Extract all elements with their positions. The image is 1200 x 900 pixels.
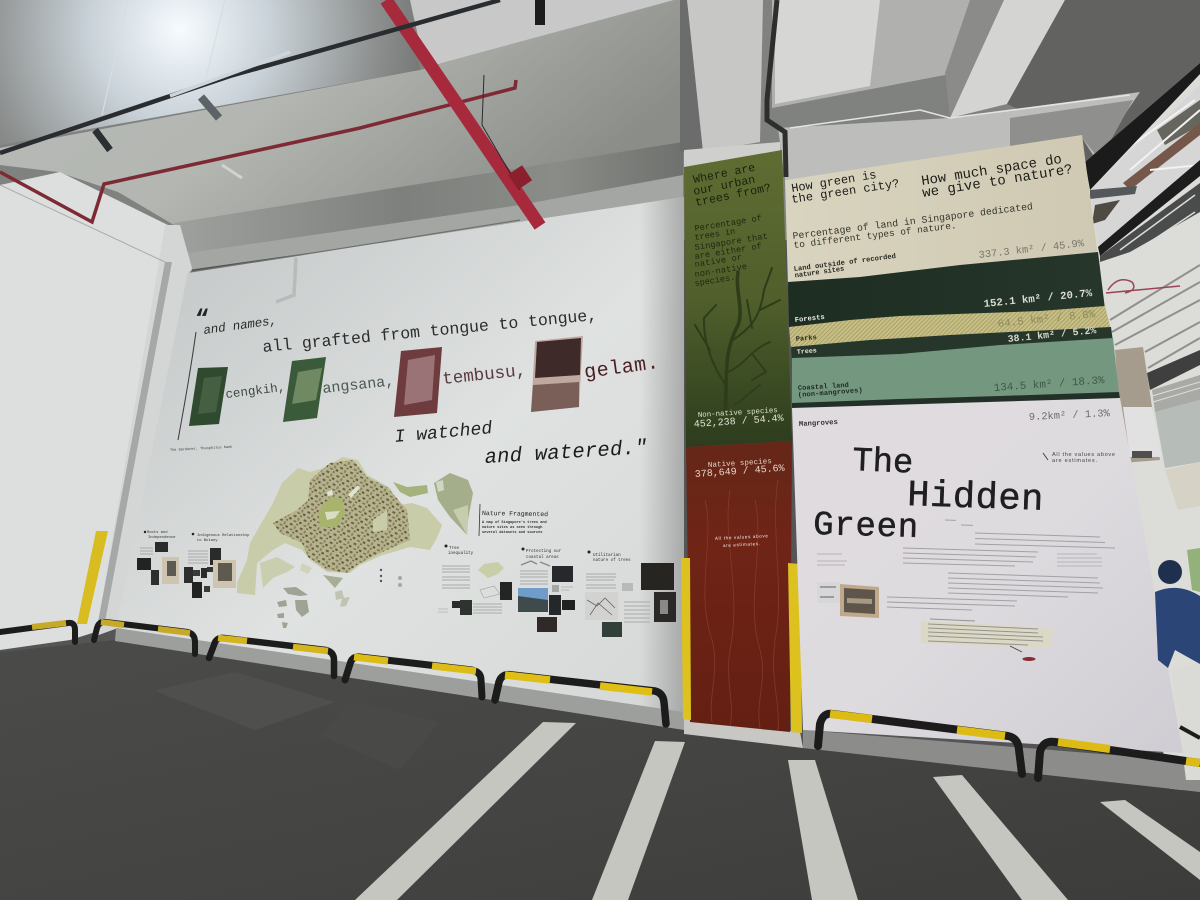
band: forests [788, 252, 1105, 329]
stat: native species: 378,649 / 45.6% [694, 463, 785, 481]
panel: Protecting our coastal areas [518, 548, 575, 632]
safety barriers [0, 622, 1200, 778]
left side wall [0, 172, 178, 650]
map: Singapore nature fragmented [237, 457, 473, 628]
fire sprinkler pipes [0, 0, 540, 226]
heading: how green is the green city: How much space do [920, 152, 1063, 190]
description: are either of [694, 241, 763, 262]
heading: how green is the green city: we give to nature? [921, 162, 1074, 202]
black conduit and track lights [0, 0, 1130, 302]
band: coastal land [792, 338, 1119, 405]
note: estimates: All the values above [715, 533, 768, 541]
barrier 4 [345, 657, 482, 697]
label: trees: Trees [797, 347, 817, 357]
side notes [817, 554, 1102, 566]
description: native or [694, 253, 743, 270]
barrier 6 [818, 714, 1022, 774]
barrier 7 [1038, 742, 1200, 778]
band: parks [789, 306, 1111, 349]
label: forests: Forests [794, 314, 825, 325]
description [482, 520, 547, 535]
floor [0, 640, 1200, 900]
text block: Nature Fragmented [479, 504, 548, 536]
ceiling: upper band [0, 0, 690, 225]
value: parks: 64.5 km² / 8.8% [997, 309, 1096, 331]
panel: Protecting our coastal areas: Protecting our [526, 549, 562, 554]
ceiling: beam lip [174, 175, 683, 272]
note: all the values above are estimates: All the values above [1052, 452, 1115, 458]
ceiling: lit slab [0, 0, 1200, 240]
exterior: base [1085, 63, 1200, 790]
callout: highlighted note [921, 619, 1053, 661]
photo: gelam [531, 336, 583, 412]
stat: non-native species: 452,238 / 54.4% [693, 413, 784, 431]
quote line: I watched: I watched [394, 419, 493, 448]
heading: where are our urban trees from: our urban [692, 174, 757, 199]
heading: Nature Fragmented [482, 510, 548, 518]
photo: angsana [283, 357, 326, 422]
label: land outside: nature sites [794, 266, 845, 280]
contour lines [705, 480, 779, 730]
panel: Indigenous Relationship to Botany: Indigenous Relationship [197, 533, 250, 538]
note: all the values above are estimates [1043, 452, 1115, 464]
exterior view on the right [1085, 63, 1200, 790]
ceiling: upper left slab with light bloom [0, 0, 420, 145]
description: to different types of nature. [793, 220, 957, 251]
value: land outside: 337.3 km² / 45.9% [978, 238, 1086, 262]
value: trees: 38.1 km² / 5.2% [1007, 325, 1097, 345]
photo: tembusu [394, 347, 442, 417]
map: western islands [260, 557, 295, 588]
wall corner shade [640, 197, 684, 722]
exterior: services and pipes [1110, 265, 1200, 368]
panel: Tree inequality: Tree [449, 547, 460, 551]
yellow corner post [77, 531, 108, 624]
lower white panel [792, 398, 1183, 753]
map: Pulau Tekong [434, 473, 473, 535]
panel: Roots and Independence: Roots and [147, 530, 168, 535]
description: trees in [694, 227, 736, 243]
description: non-native [694, 262, 748, 280]
barrier 1 [0, 623, 75, 642]
parking stripes [355, 722, 1200, 900]
panel: Protecting our coastal areas: coastal areas [526, 555, 559, 560]
heading: how green is the green city [790, 152, 1074, 207]
description: Singapore that [694, 232, 769, 253]
label: land outside: Land outside of recorded [793, 253, 897, 274]
map: coastal shoal [323, 575, 343, 588]
exterior: dark slab [1147, 350, 1200, 390]
band: trees [791, 327, 1113, 361]
exterior: lower truss [1100, 183, 1200, 262]
wall base curb [115, 628, 684, 730]
side wall corner column [96, 225, 192, 636]
note: all the values above are estimates: are estimates. [1052, 458, 1097, 464]
person silhouette outside [1155, 560, 1200, 780]
description: species. [694, 273, 736, 289]
artifact: framed specimen box [817, 582, 879, 618]
panel: red column, native species [686, 441, 792, 732]
description: Percentage of land in Singapore dedicated [792, 201, 1034, 242]
map: reservoirs [348, 485, 360, 498]
description: Percentage of [694, 213, 763, 234]
description: several datasets and sources [482, 530, 542, 535]
band: land outside of recorded nature sites [785, 135, 1098, 286]
quote line: all grafted: all grafted from tongue to tongue, [262, 306, 598, 357]
panel: Tree inequality [438, 544, 512, 615]
word: cengkih: cengkih, [225, 381, 286, 402]
panel: Indigenous Relationship to Botany: to Botany [197, 539, 218, 543]
map: Pulau Ubin [393, 482, 428, 497]
title: The Hidden Green: Green [813, 507, 919, 548]
stat: non-native species: Non-native species [698, 407, 778, 420]
map: central forest [318, 497, 345, 527]
icon: red mark [1022, 657, 1036, 661]
note: estimates: are estimates. [723, 541, 760, 548]
exterior: far wall [1155, 400, 1200, 468]
text block: introduction [887, 520, 1115, 610]
panel: Utilitarian nature of trees: Utilitarian [593, 553, 621, 558]
exterior: balustrade [1165, 462, 1200, 510]
panel: Utilitarian nature of trees [585, 550, 676, 637]
value: forests: 152.1 km² / 20.7% [983, 288, 1093, 311]
panel: Tree inequality: inequality [448, 551, 474, 556]
title: The Hidden Green: Hidden [907, 475, 1044, 522]
exterior: translucent banner [1115, 347, 1160, 463]
description: A map of Singapore's trees and [482, 520, 547, 525]
description [694, 213, 769, 289]
right ceiling and column [680, 0, 1200, 180]
word: angsana: angsana, [322, 373, 395, 398]
attribution: The Gardener, Theophilus Kwek [170, 445, 233, 453]
heading: where are our urban trees from [692, 162, 772, 210]
map: southern islands [277, 587, 309, 628]
floor wear marks [155, 672, 335, 730]
note: estimates [715, 533, 768, 548]
exterior: upper truss panes [1090, 85, 1200, 247]
quote line: and watered: and watered." [484, 437, 648, 470]
panel: land use chart [785, 135, 1183, 753]
panel: Roots and Independence [137, 530, 179, 585]
panel: green column, urban trees [684, 150, 792, 447]
value: coastal: 134.5 km² / 18.3% [993, 375, 1105, 395]
title: The Hidden Green [813, 443, 1044, 548]
yellow pillar edging [681, 558, 802, 733]
map: inner green patch [373, 510, 387, 532]
value: mangroves: 9.2km² / 1.3% [1029, 408, 1111, 424]
photo: cengkih [189, 367, 228, 426]
label: coastal: (non-mangroves) [798, 387, 863, 400]
ceiling: light beam segment [410, 0, 674, 68]
icon: tree illustration [695, 268, 780, 412]
panel: Utilitarian nature of trees: nature of trees [593, 558, 631, 563]
exterior: black truss bars [1085, 63, 1200, 190]
right wall base curb [803, 730, 1200, 792]
pillar base curb [684, 718, 803, 748]
title: The Hidden Green: The [852, 443, 914, 484]
description: nature sites as seen through [482, 525, 542, 530]
band: mangroves edge [792, 392, 1120, 409]
map: legend [380, 569, 402, 587]
heading: where are our urban trees from: trees from? [694, 182, 772, 210]
heading: how green is the green city: How green is [790, 168, 877, 196]
barrier 2 [94, 622, 195, 654]
label: mangroves: Mangroves [799, 419, 838, 429]
quote line: and names: and names, [203, 314, 278, 338]
stat: native species: Native species [708, 458, 772, 470]
label: coastal: Coastal land [798, 382, 849, 393]
main left wall [116, 197, 684, 722]
margin line [178, 332, 196, 440]
word: tembusu: tembusu, [442, 361, 527, 390]
map: dense urban fabric [273, 460, 410, 573]
panel: Indigenous Relationship to Botany [184, 533, 250, 598]
ceiling: lower beam soffit [174, 142, 683, 268]
quotation mark: “ [195, 307, 209, 334]
barrier 3 [209, 638, 334, 676]
label: parks: Parks [796, 334, 817, 344]
panel: quote [170, 306, 660, 470]
panel: Roots and Independence: Independence [148, 535, 176, 540]
heading: where are our urban trees from: Where are [692, 162, 757, 187]
heading: how green is the green city: the green city? [791, 177, 900, 207]
word: gelam: gelam. [583, 352, 660, 385]
map: main island [237, 457, 442, 595]
barrier 5 [495, 675, 666, 724]
